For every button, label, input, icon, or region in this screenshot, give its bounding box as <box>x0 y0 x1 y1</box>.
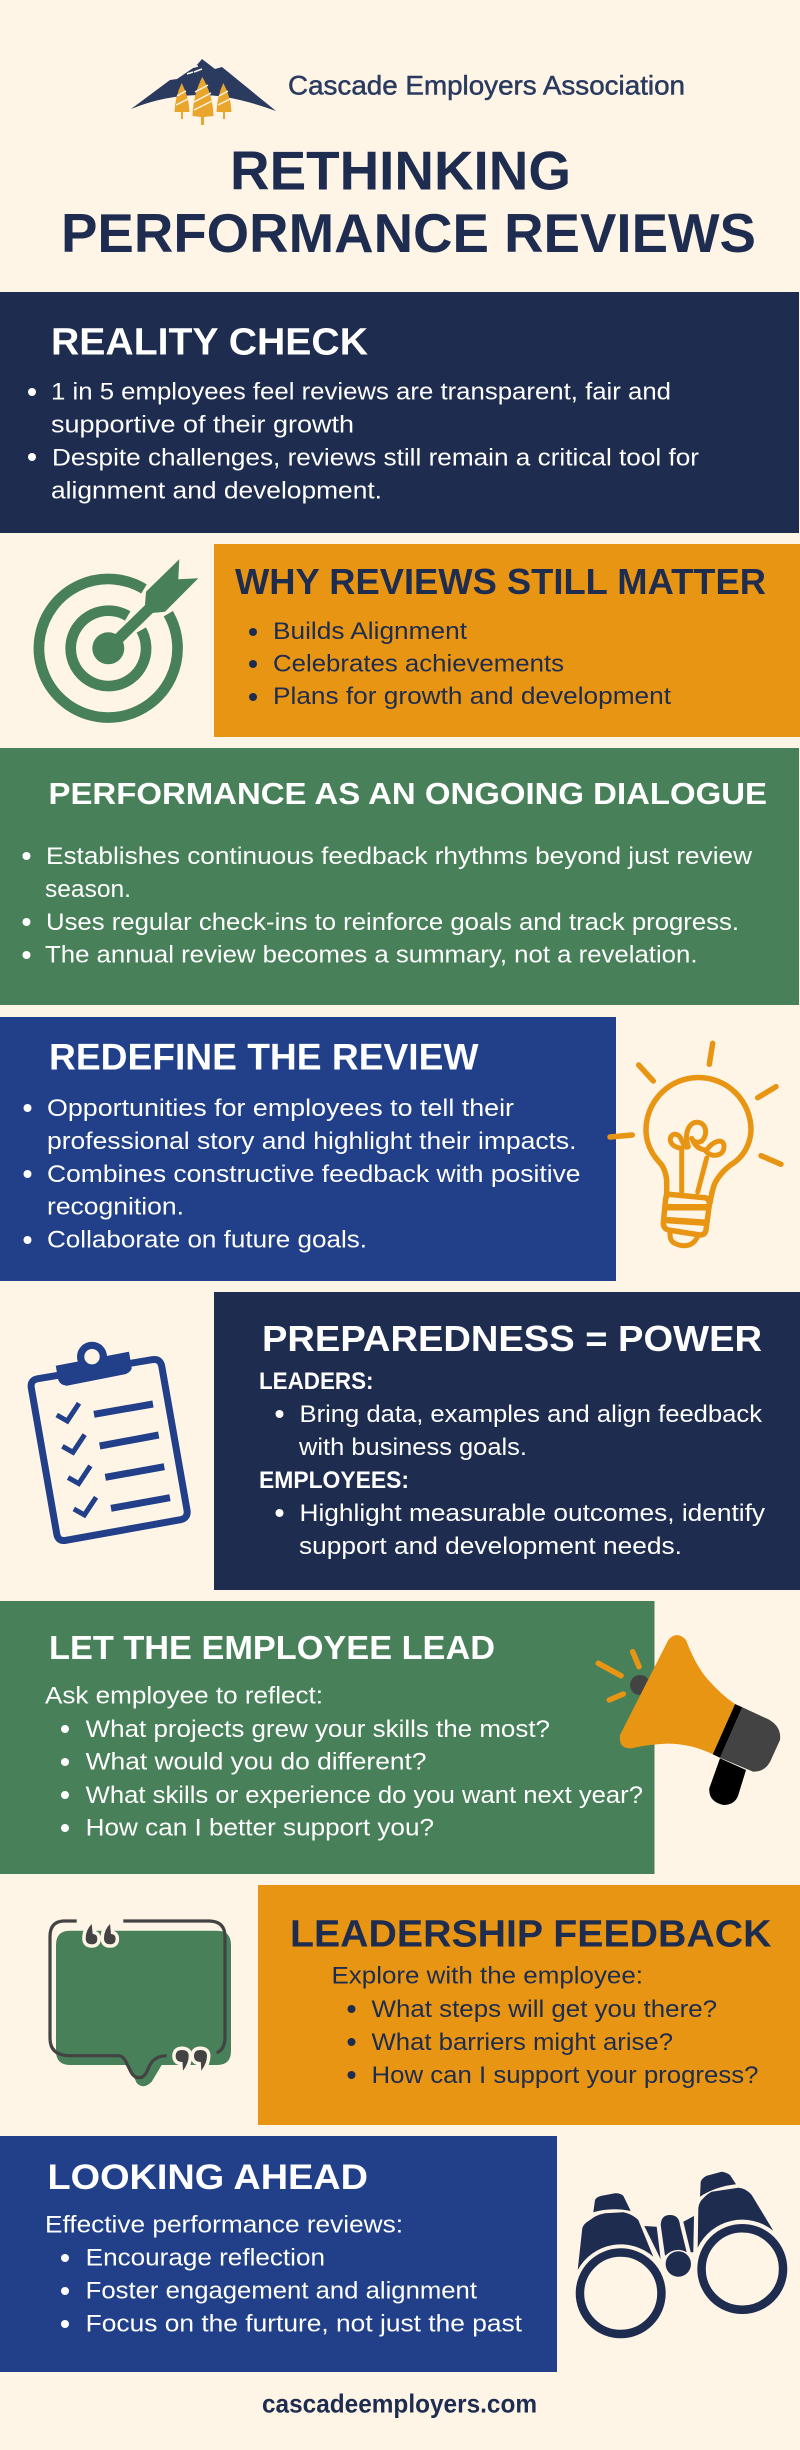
icon: clipboard checklist <box>31 1342 187 1541</box>
title: PERFORMANCE REVIEWS <box>61 202 756 264</box>
bullet list: explore with the employee: What barriers might arise? <box>372 2029 673 2056</box>
bullet list: why reviews matter: Celebrates achievements <box>273 650 564 678</box>
bullet list: ongoing dialogue: season. <box>45 876 131 903</box>
text block: leaders: with business goals. <box>298 1434 527 1461</box>
bullet list: reality check: supportive of their growth <box>51 412 354 438</box>
title: RETHINKING <box>230 140 571 202</box>
bullet list: redefine the review <box>24 1095 580 1254</box>
bullet list: effective performance reviews: Encourage reflection <box>86 2244 325 2272</box>
title <box>61 140 756 264</box>
bullet list: reality check: 1 in 5 employees feel reviews are transparent, fair and <box>51 378 671 406</box>
icon: mountain and trees <box>131 59 276 125</box>
panel: performance as an ongoing dialogue <box>0 748 799 1005</box>
bullet list: employee reflection questions: Ask employee to reflect: <box>45 1682 323 1710</box>
text block: leaders: Bring data, examples and align feedback <box>300 1401 763 1428</box>
bullet list: explore with the employee: What steps will get you there? <box>372 1996 717 2023</box>
icon: megaphone <box>598 1635 780 1805</box>
bullet list: redefine the review: Combines constructive feedback with positive <box>47 1161 580 1188</box>
panel: why reviews still matter <box>214 544 800 737</box>
heading: performance as an ongoing dialogue: PERFORMANCE AS AN ONGOING DIALOGUE <box>48 776 767 811</box>
icon: binoculars <box>578 2172 783 2334</box>
bullet list: ongoing dialogue <box>22 843 752 968</box>
bullet list: employee reflection questions: How can I better support you? <box>86 1814 434 1842</box>
bullet list: explore with the employee <box>332 1962 758 2089</box>
text block: leaders <box>259 1368 763 1461</box>
bullet list: employee reflection questions: What projects grew your skills the most? <box>86 1716 550 1743</box>
heading: why reviews still matter: WHY REVIEWS STILL MATTER <box>235 561 766 602</box>
bullet list: why reviews matter: Plans for growth and development <box>273 683 671 710</box>
bullet list: reality check: alignment and development. <box>51 478 382 504</box>
bullet list: employee reflection questions: What skills or experience do you want next year? <box>86 1782 643 1809</box>
icon: speech bubble with quotes <box>50 1921 231 2086</box>
heading: preparedness = power: PREPAREDNESS = POWER <box>262 1318 762 1359</box>
bullet list: explore with the employee: Explore with the employee: <box>332 1962 643 1990</box>
bullet list: ongoing dialogue: Establishes continuous feedback rhythms beyond just review <box>46 843 752 870</box>
icon: target with arrow <box>39 559 198 718</box>
bullet list: explore with the employee: How can I support your progress? <box>372 2062 758 2089</box>
bullet list: effective performance reviews: Effective performance reviews: <box>45 2212 403 2238</box>
bullet list: ongoing dialogue: Uses regular check-ins to reinforce goals and track progress. <box>46 909 739 936</box>
bullet list: effective performance reviews: Focus on the furture, not just the past <box>86 2310 522 2338</box>
bullet list: reality check: Despite challenges, reviews still remain a critical tool for <box>52 444 699 472</box>
bullet list: why reviews matter: Builds Alignment <box>273 618 467 645</box>
bullet list: reality check <box>28 378 699 504</box>
bullet list: employee reflection questions <box>45 1682 643 1842</box>
bullet list: redefine the review: Opportunities for employees to tell their <box>47 1095 514 1122</box>
panel: preparedness equals power <box>214 1292 800 1590</box>
bullet list: redefine the review: professional story and highlight their impacts. <box>47 1128 576 1155</box>
text block: employees: EMPLOYEES: <box>259 1467 409 1494</box>
bullet list: why reviews matter <box>249 618 671 710</box>
bullet list: ongoing dialogue: The annual review becomes a summary, not a revelation. <box>45 942 698 968</box>
panel: looking ahead <box>0 2136 557 2372</box>
logo wordmark: Cascade Employers Association <box>288 70 685 100</box>
text block: employees <box>259 1467 766 1560</box>
panel: reality check <box>0 292 799 533</box>
heading: let the employee lead: LET THE EMPLOYEE LEAD <box>49 1629 495 1666</box>
text block: employees: Highlight measurable outcomes, identify <box>300 1500 766 1527</box>
heading: redefine the review: REDEFINE THE REVIEW <box>49 1036 479 1078</box>
footer: website: cascadeemployers.com <box>262 2388 537 2418</box>
panel: leadership feedback <box>258 1885 800 2125</box>
text block: employees: support and development needs. <box>299 1533 682 1560</box>
text block: leaders: LEADERS: <box>259 1368 374 1395</box>
logo: Cascade Employers Association <box>131 59 685 125</box>
bullet list: redefine the review: recognition. <box>47 1194 184 1220</box>
icon: lightbulb <box>610 1043 781 1246</box>
bullet list: employee reflection questions: What would you do different? <box>86 1748 426 1776</box>
panel: let the employee lead <box>0 1601 654 1874</box>
heading: looking ahead: LOOKING AHEAD <box>48 2158 368 2197</box>
bullet list: effective performance reviews <box>45 2212 522 2338</box>
bullet list: effective performance reviews: Foster engagement and alignment <box>86 2278 477 2304</box>
heading: leadership feedback: LEADERSHIP FEEDBACK <box>290 1914 772 1956</box>
panel: redefine the review <box>0 1017 616 1281</box>
bullet list: redefine the review: Collaborate on future goals. <box>47 1226 367 1254</box>
heading: reality check: REALITY CHECK <box>51 322 369 364</box>
